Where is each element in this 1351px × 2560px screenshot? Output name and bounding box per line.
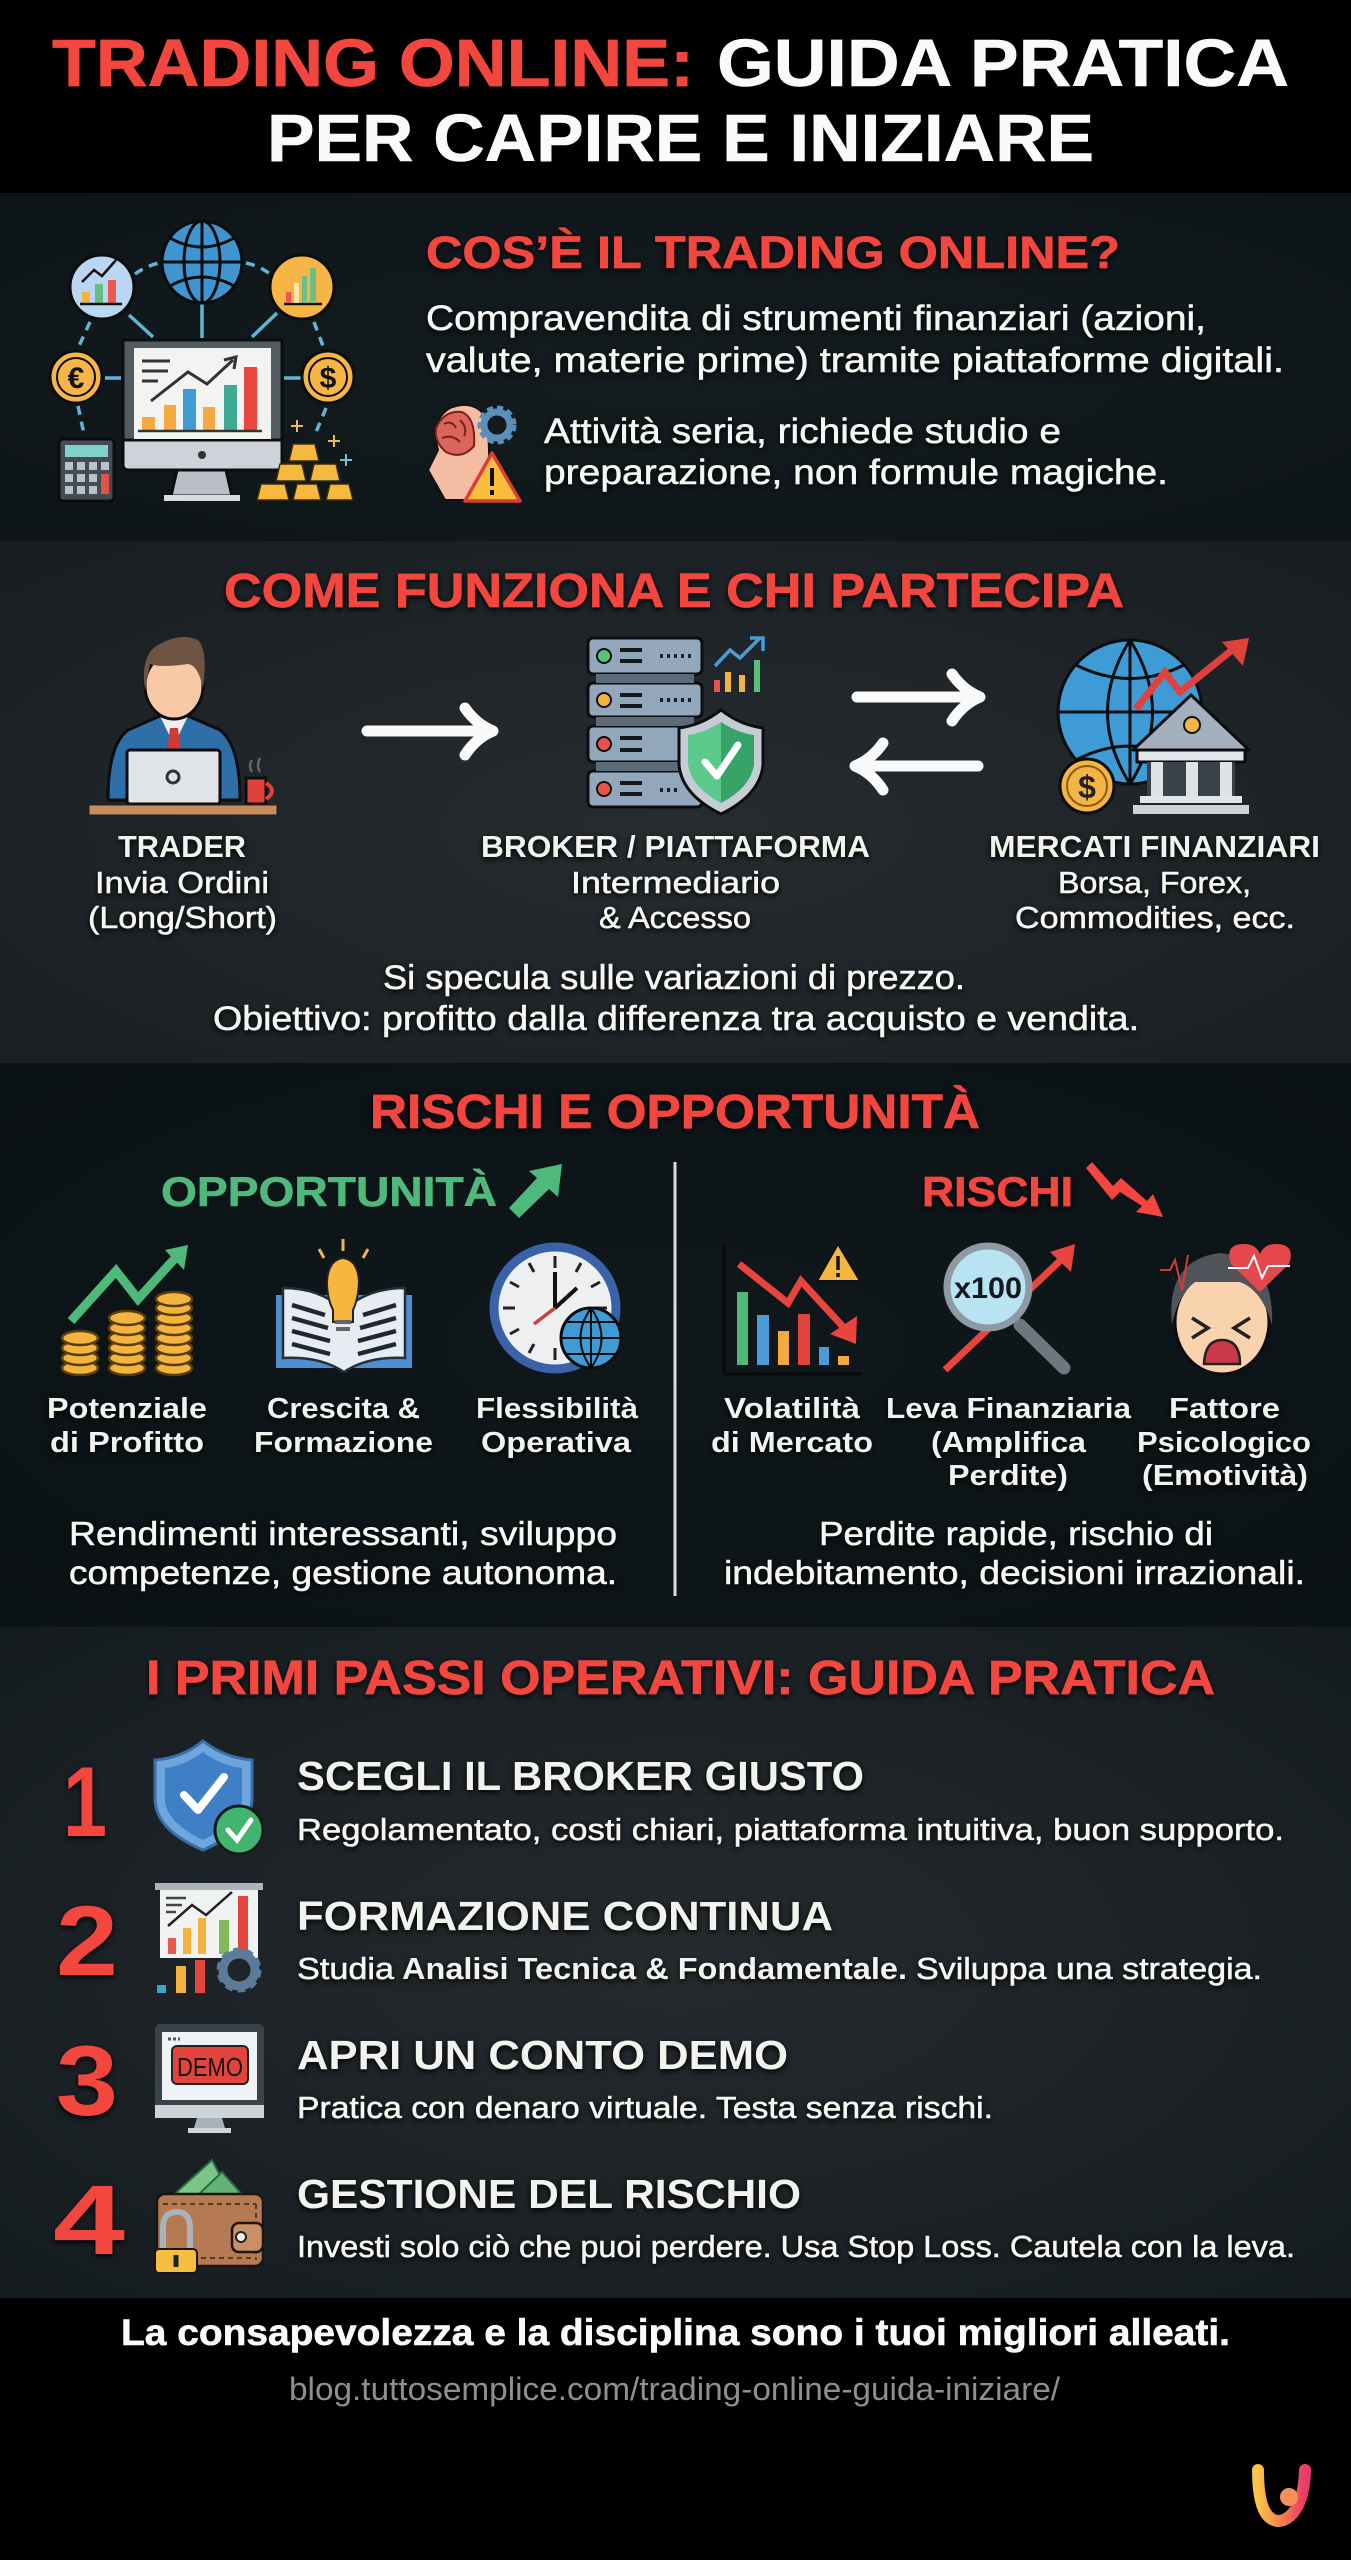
- labels: rischi: Perdite): [948, 1460, 1068, 1492]
- warning note: [544, 412, 1168, 492]
- heading: COME FUNZIONA E CHI PARTECIPA: [224, 565, 1124, 618]
- summary: rischi: indebitamento, decisioni irrazionali.: [724, 1554, 1305, 1591]
- summary: rischi: [724, 1515, 1305, 1591]
- definition text: Compravendita di strumenti finanziari (azioni,: [426, 299, 1206, 338]
- title: TRADING ONLINE:: [52, 26, 694, 101]
- icon: broker servers and shield: [588, 638, 763, 814]
- rischi heading: RISCHI: [922, 1168, 1073, 1215]
- label: broker: Intermediario: [571, 865, 780, 900]
- step 3: [56, 2024, 993, 2136]
- labels: rischi: (Emotività): [1142, 1460, 1308, 1492]
- labels: rischi: (Amplifica: [931, 1427, 1087, 1459]
- illustration: monitor with market network: [50, 221, 354, 501]
- icon: trader at laptop: [89, 637, 277, 815]
- labels: opportunità: Flessibilità: [476, 1393, 639, 1425]
- label: broker: BROKER / PIATTAFORMA: [481, 829, 870, 864]
- step 4: [53, 2160, 1295, 2275]
- icon: coins and rising arrow: [62, 1245, 192, 1375]
- label: trader: (Long/Short): [88, 900, 277, 935]
- labels: rischi: [711, 1393, 1311, 1492]
- label: markets: MERCATI FINANZIARI: [989, 829, 1320, 864]
- step 4 text: Investi solo ciò che puoi perdere. Usa Stop Loss. Cautela con la leva.: [297, 2229, 1295, 2264]
- summary: opportunità: [69, 1515, 617, 1591]
- explanation text: [213, 959, 1139, 1038]
- arrow: broker to markets: [857, 674, 980, 721]
- arrow: markets to broker: [855, 743, 978, 790]
- icon: clock and globe: [494, 1247, 621, 1369]
- step 1 text: [297, 1753, 1284, 1847]
- step 3 text: APRI UN CONTO DEMO: [297, 2032, 788, 2078]
- labels: opportunità: Operativa: [481, 1427, 632, 1459]
- source url: blog.tuttosemplice.com/trading-online-guida-iniziare/: [289, 2371, 1060, 2407]
- step 1 text: SCEGLI IL BROKER GIUSTO: [297, 1753, 864, 1799]
- icon: shield with checks: [155, 1741, 263, 1854]
- explanation text: Si specula sulle variazioni di prezzo.: [383, 959, 965, 997]
- step 2 text: Analisi Tecnica & Fondamentale.: [402, 1951, 907, 1986]
- label: broker: [481, 829, 870, 935]
- number 3: 3: [56, 2025, 118, 2136]
- panel: come funziona e chi partecipa: [88, 565, 1320, 1038]
- labels: opportunità: Formazione: [254, 1427, 433, 1459]
- label: trader: Invia Ordini: [95, 865, 269, 900]
- labels: opportunità: [47, 1393, 639, 1459]
- icon: book and light bulb: [276, 1239, 412, 1372]
- heading: I PRIMI PASSI OPERATIVI: GUIDA PRATICA: [146, 1652, 1215, 1705]
- labels: rischi: Fattore: [1169, 1393, 1280, 1425]
- heading: RISCHI E OPPORTUNITÀ: [370, 1085, 980, 1139]
- explanation text: Obiettivo: profitto dalla differenza tra acquisto e vendita.: [213, 1000, 1139, 1038]
- summary: opportunità: competenze, gestione autonoma.: [69, 1554, 617, 1591]
- summary: opportunità: Rendimenti interessanti, sviluppo: [69, 1515, 617, 1552]
- step 2 text: Sviluppa una strategia.: [916, 1951, 1262, 1986]
- number 4: 4: [53, 2164, 125, 2275]
- illustration: monitor with market network: $: [320, 362, 337, 395]
- label: broker: & Accesso: [599, 900, 751, 935]
- step 4 text: [297, 2171, 1295, 2264]
- definition text: valute, materie prime) tramite piattaforme digitali.: [426, 341, 1284, 380]
- labels: rischi: di Mercato: [711, 1427, 873, 1459]
- step 2 text: Studia: [297, 1951, 395, 1986]
- heading: COS’È IL TRADING ONLINE?: [426, 227, 1120, 278]
- labels: rischi: Volatilità: [724, 1393, 861, 1425]
- labels: opportunità: Potenziale: [47, 1393, 207, 1425]
- step 2 text: FORMAZIONE CONTINUA: [297, 1893, 833, 1939]
- step 3 text: [297, 2032, 993, 2125]
- icon: stressed head and heart: [1160, 1244, 1291, 1374]
- panel: primi passi operativi: [53, 1652, 1295, 2275]
- arrow: up: [509, 1164, 562, 1218]
- labels: opportunità: Crescita &: [267, 1393, 420, 1425]
- warning note: preparazione, non formule magiche.: [544, 453, 1168, 492]
- step 4 text: GESTIONE DEL RISCHIO: [297, 2171, 801, 2217]
- illustration: monitor with market network: €: [68, 362, 85, 395]
- labels: opportunità: di Profitto: [50, 1427, 204, 1459]
- title: PER CAPIRE E INIZIARE: [267, 101, 1094, 176]
- icon: demo monitor: DEMO: [177, 2052, 243, 2082]
- label: markets: Commodities, ecc.: [1015, 900, 1295, 935]
- label: trader: TRADER: [118, 829, 246, 864]
- step 2: [56, 1883, 1262, 1996]
- definition text: [426, 299, 1284, 380]
- footer message: La consapevolezza e la disciplina sono i tuoi migliori alleati.: [121, 2312, 1230, 2353]
- icon: head with brain, gear and warning: [428, 405, 520, 501]
- icon: leverage magnifier: x100: [954, 1272, 1022, 1305]
- icon: financial markets: [1058, 638, 1249, 814]
- labels: rischi: Leva Finanziaria: [886, 1393, 1132, 1425]
- panel: rischi e opportunità: [47, 1085, 1311, 1596]
- logo: [1258, 2470, 1305, 2521]
- opportunità heading: OPPORTUNITÀ: [161, 1168, 497, 1215]
- arrow: trader to broker: [367, 708, 493, 755]
- number 2: 2: [56, 1885, 118, 1996]
- icon: demo monitor: [155, 2024, 264, 2133]
- step 2 text: [297, 1893, 1262, 1986]
- step 1 text: Regolamentato, costi chiari, piattaforma intuitiva, buon supporto.: [297, 1812, 1284, 1847]
- label: markets: Borsa, Forex,: [1058, 865, 1251, 900]
- icon: financial markets: $: [1078, 769, 1096, 805]
- icon: volatility chart: [724, 1244, 862, 1374]
- icon: presentation board and gear: [155, 1883, 263, 1993]
- number 1: 1: [63, 1746, 107, 1857]
- icon: leverage magnifier: [945, 1244, 1075, 1370]
- label: markets: [989, 829, 1320, 935]
- panel: cos'è il trading online: [50, 221, 1284, 501]
- warning note: Attività seria, richiede studio e: [544, 412, 1061, 451]
- step 1: [63, 1741, 1284, 1857]
- icon: wallet with padlock: [155, 2160, 263, 2273]
- label: trader: [88, 829, 277, 935]
- arrow: down: [1086, 1162, 1163, 1217]
- summary: rischi: Perdite rapide, rischio di: [819, 1515, 1213, 1552]
- step 3 text: Pratica con denaro virtuale. Testa senza rischi.: [297, 2090, 993, 2125]
- title: GUIDA PRATICA: [717, 26, 1289, 101]
- title: [52, 26, 1289, 176]
- labels: rischi: Psicologico: [1137, 1427, 1311, 1459]
